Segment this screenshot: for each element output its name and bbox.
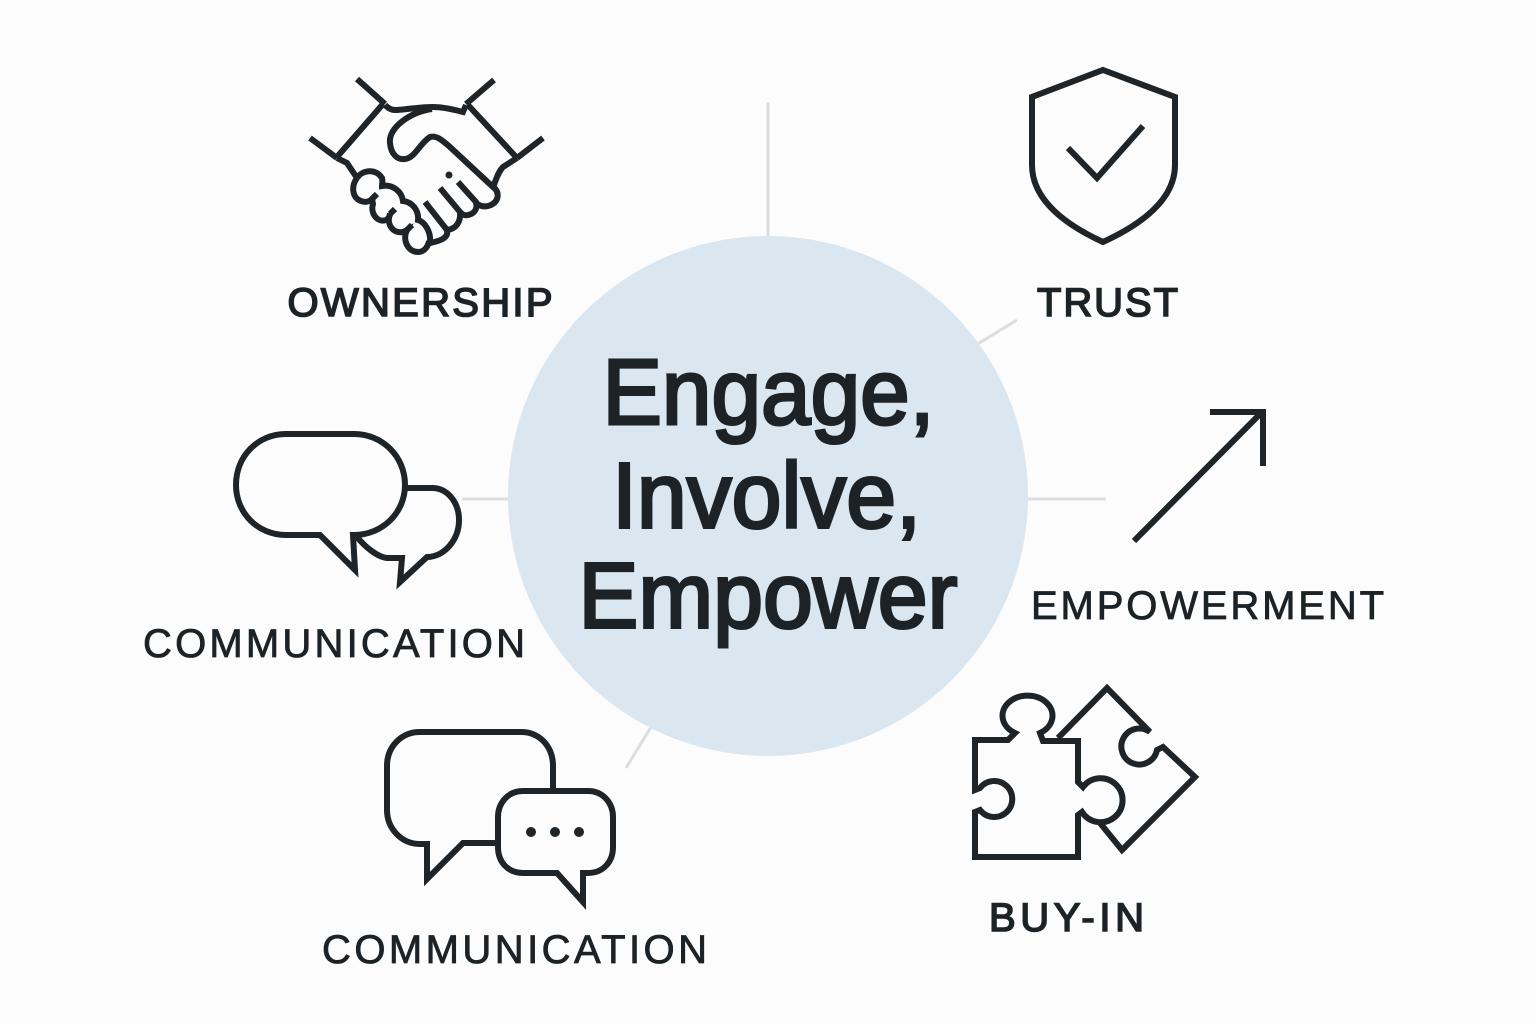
icon: shield with check (1032, 70, 1175, 242)
title (578, 340, 958, 648)
central circle (508, 236, 1028, 756)
label: communication bottom: COMMUNICATION (322, 928, 707, 972)
title: Empower (578, 544, 958, 648)
label: trust: TRUST (1037, 281, 1178, 325)
icon: handshake (310, 79, 543, 252)
icon: speech bubbles (236, 434, 459, 582)
label: empowerment: EMPOWERMENT (1031, 584, 1384, 628)
title: Engage, (602, 340, 934, 444)
icon: chat bubbles with dots (387, 732, 613, 902)
title: Involve, (612, 444, 921, 548)
icon: puzzle pieces (975, 688, 1195, 857)
label: communication left: COMMUNICATION (143, 622, 525, 666)
icon: arrow up right (1134, 412, 1263, 541)
label: ownership: OWNERSHIP (288, 281, 552, 325)
label: buy-in: BUY-IN (989, 896, 1144, 940)
